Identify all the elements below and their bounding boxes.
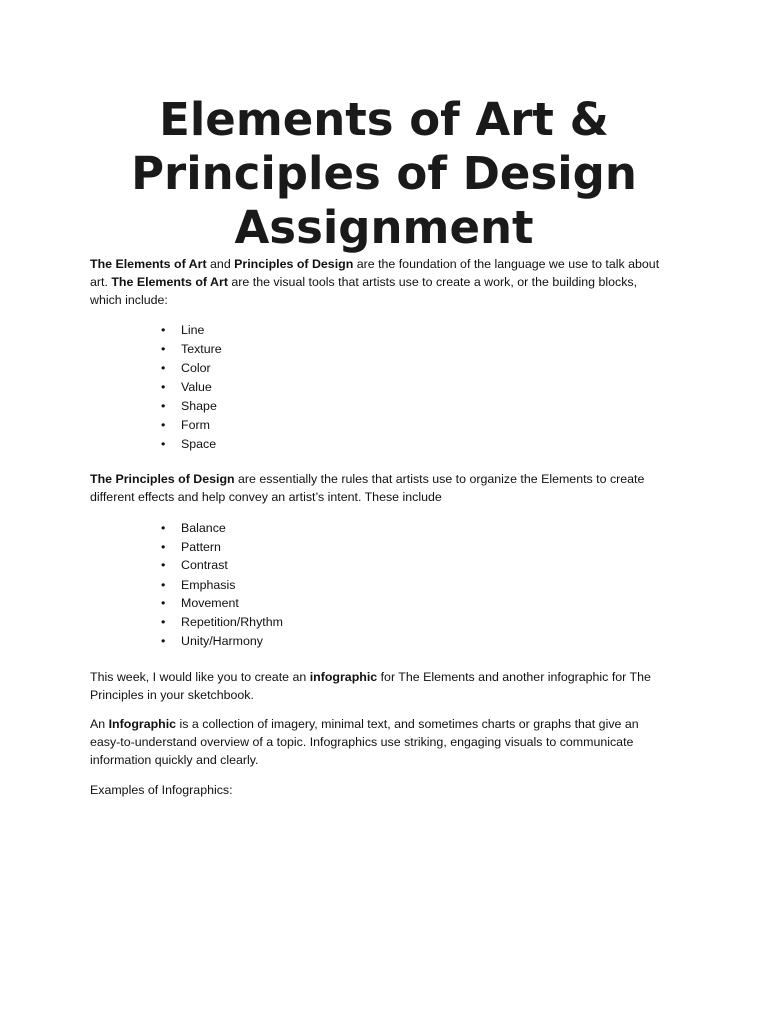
list: principles: Contrast <box>181 558 228 572</box>
list: principles: • <box>161 634 165 648</box>
intro paragraph <box>90 257 660 307</box>
list: principles: • <box>161 521 165 535</box>
list: elements: Value <box>181 380 212 394</box>
list: elements: • <box>161 342 165 356</box>
title: Elements of Art & <box>159 93 609 146</box>
list: principles: • <box>161 558 165 572</box>
list: principles: Pattern <box>181 540 221 554</box>
intro paragraph: which include: <box>90 293 168 307</box>
definition paragraph: easy-to-understand overview of a topic. Infographics use striking, engaging visuals to communicate <box>90 735 633 749</box>
list: principles: Balance <box>181 521 226 535</box>
list: elements: Space <box>181 437 216 451</box>
principles paragraph: different effects and help convey an artist’s intent. These include <box>90 490 442 504</box>
list: principles: Emphasis <box>181 578 235 592</box>
title: Principles of Design <box>131 147 637 200</box>
assignment paragraph: This week, I would like you to create an infographic for The Elements and another infographic for The <box>90 670 651 684</box>
list: principles: • <box>161 596 165 610</box>
assignment paragraph: Principles in your sketchbook. <box>90 688 254 702</box>
list: elements <box>161 323 222 451</box>
list: elements: Form <box>181 418 210 432</box>
list: elements: • <box>161 361 165 375</box>
examples label: Examples of Infographics: <box>90 783 233 797</box>
list: elements: Line <box>181 323 204 337</box>
intro paragraph: The Elements of Art and Principles of Design are the foundation of the language we use to talk about <box>90 257 659 271</box>
definition paragraph: information quickly and clearly. <box>90 753 258 767</box>
list: elements: Shape <box>181 399 217 413</box>
list: principles: Repetition/Rhythm <box>181 615 283 629</box>
list: elements: • <box>161 418 165 432</box>
list: principles <box>161 521 283 648</box>
list: principles: Unity/Harmony <box>181 634 263 648</box>
list: elements: • <box>161 323 165 337</box>
list: principles: Movement <box>181 596 239 610</box>
list: principles: • <box>161 578 165 592</box>
list: elements: Texture <box>181 342 222 356</box>
list: principles: • <box>161 540 165 554</box>
assignment paragraph <box>90 670 651 702</box>
list: elements: • <box>161 380 165 394</box>
title: Assignment <box>234 201 534 254</box>
list: elements: • <box>161 437 165 451</box>
principles paragraph <box>90 472 644 504</box>
definition paragraph <box>90 717 639 767</box>
intro paragraph: art. The Elements of Art are the visual tools that artists use to create a work, or the building blocks, <box>90 275 637 289</box>
definition paragraph: An Infographic is a collection of imagery, minimal text, and sometimes charts or graphs that give an <box>90 717 639 731</box>
title <box>131 93 637 254</box>
list: elements: Color <box>181 361 211 375</box>
list: elements: • <box>161 399 165 413</box>
principles paragraph: The Principles of Design are essentially the rules that artists use to organize the Elements to create <box>90 472 644 486</box>
list: principles: • <box>161 615 165 629</box>
